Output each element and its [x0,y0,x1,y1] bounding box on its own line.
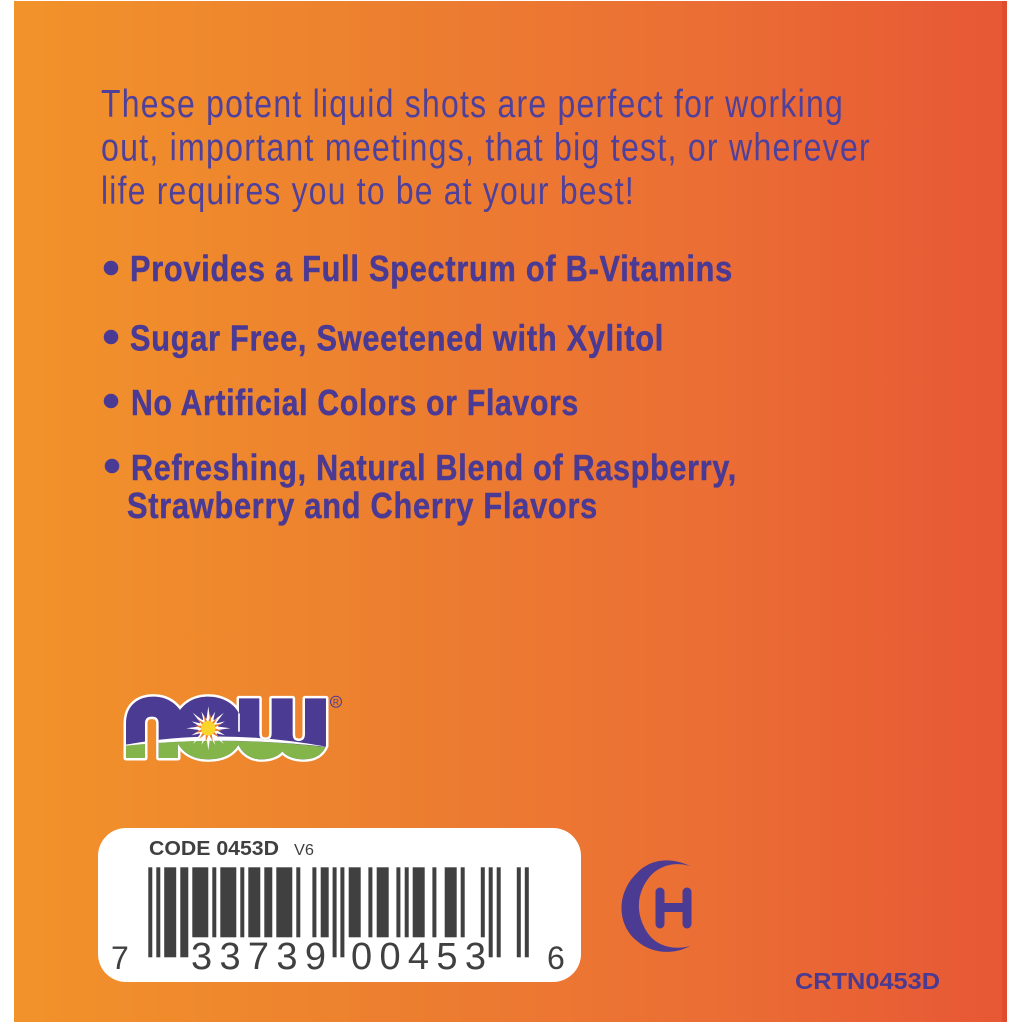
right edge fold [1002,1,1007,1022]
barcode label [98,828,581,982]
intro paragraph [101,83,871,213]
intro paragraph: out, important meetings, that big test, or wherever [101,126,871,170]
intro paragraph: These potent liquid shots are perfect for working [101,83,844,126]
registered mark: R [333,697,339,707]
carton code: CRTN0453D [795,968,940,994]
barcode digits: 6 [547,940,565,976]
bullet: natural blend [105,447,737,526]
intro paragraph: life requires you to be at your best! [101,170,635,213]
barcode digits: 7 [111,940,129,976]
barcode digits: 33739 [191,936,326,978]
bullet: no artificial: No Artificial Colors or Flavors [131,382,579,423]
icon: crescent H certification [621,860,690,952]
product code: CODE 0453D [149,837,279,860]
bullet: natural blend: Refreshing, Natural Blend of Raspberry, [131,447,737,488]
logo sun [186,706,230,750]
bullet: sugar free: Sugar Free, Sweetened with Xylitol [130,318,664,358]
bullet: natural blend: Strawberry and Cherry Flavors [127,485,598,526]
NOW logo [124,696,342,763]
version: V6 [294,842,314,859]
barcode bars [148,867,529,957]
barcode digits: 00453 [351,936,486,978]
registered mark [330,696,342,707]
barcode digits [111,936,565,978]
bullet: full spectrum: Provides a Full Spectrum of B-Vitamins [130,248,733,289]
